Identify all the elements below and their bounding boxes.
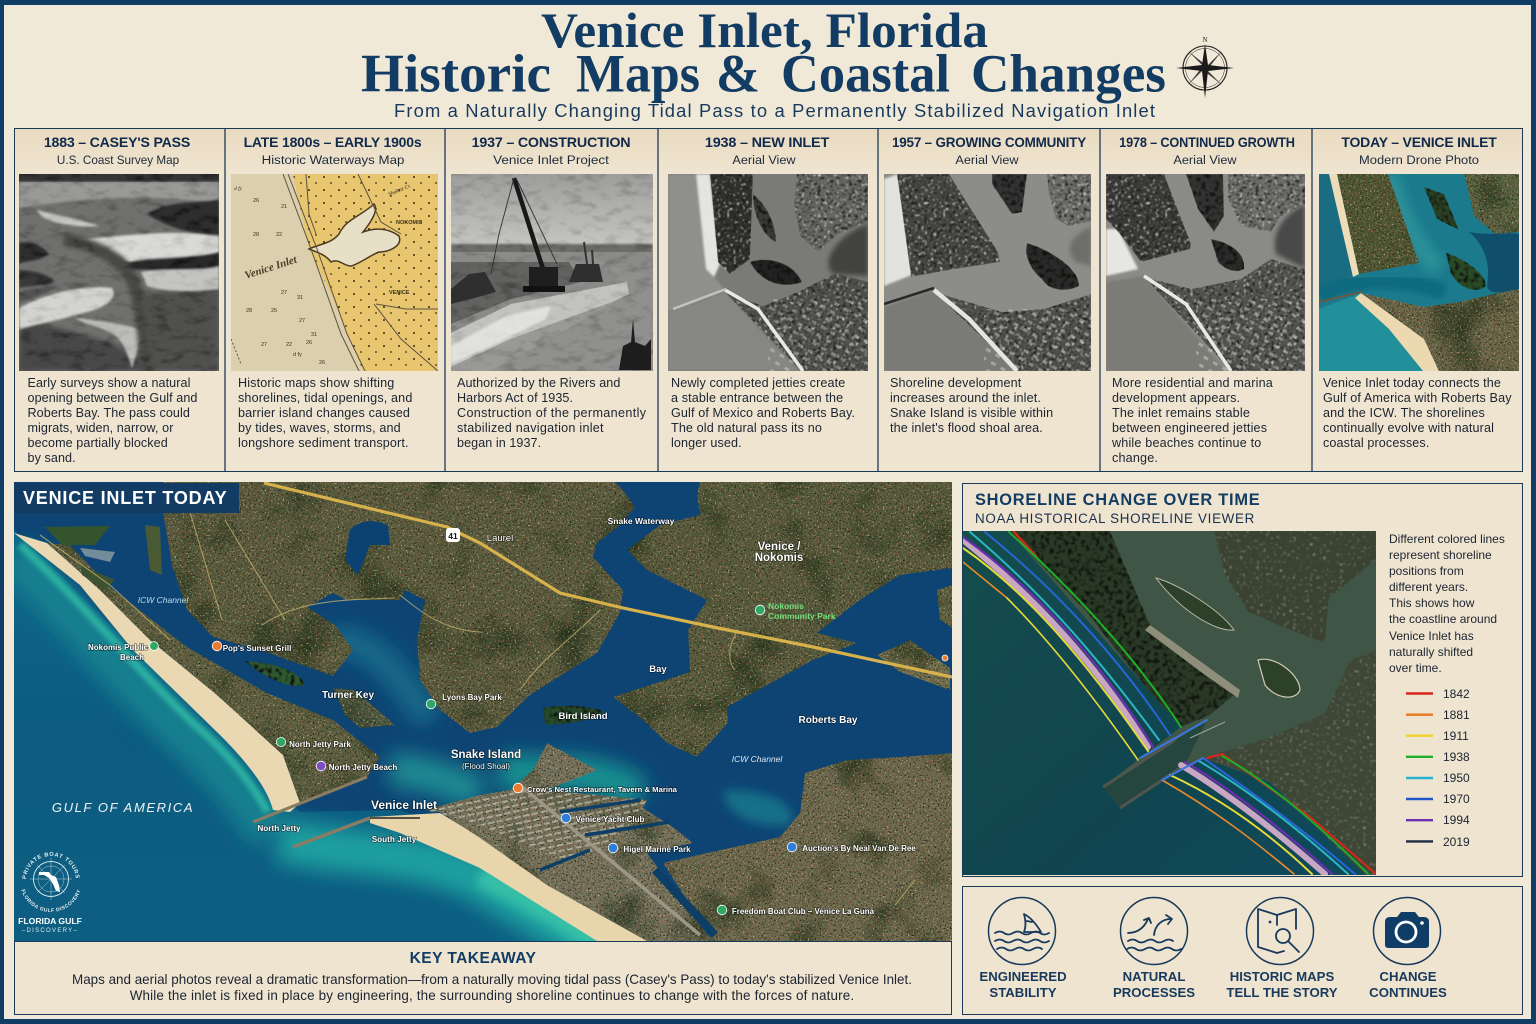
title line 2: & — [716, 44, 760, 104]
heading 1978: 1978 – CONTINUED GROWTH — [1119, 134, 1294, 150]
label: natural processes: PROCESSES — [1113, 984, 1195, 1000]
caption 1978: change. — [1112, 451, 1158, 465]
labels: Beach — [120, 653, 144, 662]
label: natural processes — [1113, 969, 1195, 1000]
timeline column dividers — [224, 129, 1313, 471]
caption 1938: longer used. — [671, 436, 742, 450]
labels: Community Park — [768, 611, 836, 621]
heading 1957: 1957 – GROWING COMMUNITY — [892, 134, 1086, 150]
map: historic waterways chart: 22 — [286, 342, 292, 348]
caption late 1800s: by tides, waves, storms, and — [238, 421, 401, 435]
heading late 1800s: LATE 1800s – EARLY 1900s — [244, 134, 421, 150]
caption late 1800s: shorelines, tidal openings, and — [238, 391, 412, 405]
heading today: TODAY – VENICE INLET — [1341, 134, 1497, 150]
shoreline description: represent shoreline — [1389, 548, 1492, 562]
shoreline description — [1389, 532, 1505, 675]
labels: 41 — [448, 531, 458, 541]
legend: shoreline years: 1970 — [1443, 792, 1470, 806]
shoreline description: Different colored lines — [1389, 532, 1505, 546]
subheading today: Modern Drone Photo — [1359, 153, 1478, 167]
map: historic waterways chart: Shakett Cr. — [388, 183, 412, 198]
photo: 1978 aerial — [1106, 174, 1305, 371]
labels — [52, 516, 916, 916]
labels: North Jetty — [257, 824, 301, 833]
labels: Venice Inlet — [371, 798, 437, 812]
subheading 1937: Venice Inlet Project — [493, 153, 608, 167]
shoreline description: over time. — [1389, 661, 1442, 675]
key takeaway heading: KEY TAKEAWAY — [410, 950, 536, 967]
caption late 1800s: longshore sediment transport. — [238, 436, 409, 450]
shoreline description: positions from — [1389, 564, 1464, 578]
jetties — [253, 777, 367, 822]
label: natural processes: NATURAL — [1123, 969, 1185, 984]
title line 2: Maps — [576, 44, 700, 104]
labels: Lyons Bay Park — [442, 693, 502, 702]
caption 1978: More residential and marina — [1112, 376, 1273, 390]
labels: Bay — [649, 664, 667, 675]
labels: Snake Waterway — [608, 516, 675, 526]
shoreline description: Venice Inlet has — [1389, 629, 1474, 643]
caption today: Gulf of America with Roberts Bay — [1323, 391, 1512, 405]
labels: South Jetty — [372, 835, 417, 844]
islands — [245, 661, 305, 686]
label: engineered stability: STABILITY — [989, 984, 1057, 1000]
caption 1937: began in 1937. — [457, 436, 541, 450]
labels: ICW Channel — [732, 754, 783, 764]
map: Venice Inlet today aerial — [14, 482, 952, 941]
caption 1938: The old natural pass its no — [671, 421, 822, 435]
caption 1937: Harbors Act of 1935. — [457, 391, 573, 405]
caption 1938: Newly completed jetties create — [671, 376, 845, 390]
caption 1957 — [890, 376, 1053, 435]
label: historic maps: HISTORIC MAPS — [1230, 969, 1334, 984]
labels: Venice / — [758, 541, 801, 553]
title line 2: Coastal — [781, 44, 950, 104]
column: today — [1319, 134, 1519, 450]
map: historic waterways chart: 26 — [319, 360, 325, 366]
caption 1937: Authorized by the Rivers and — [457, 376, 620, 390]
labels: Laurel — [487, 533, 513, 544]
legend: shoreline years: 1938 — [1443, 750, 1470, 764]
key takeaway text: Maps and aerial photos reveal a dramatic transformation—from a naturally moving tidal pass (Casey's Pass) to today's stabilized Venice Inlet. — [72, 972, 912, 987]
column: 1957 — [884, 134, 1091, 435]
photo: 1957 aerial — [884, 174, 1091, 371]
column: 1978 — [1106, 134, 1305, 465]
logo: Florida Gulf Discovery: –DISCOVERY– — [22, 928, 78, 934]
map pins — [150, 605, 948, 915]
caption 1938: a stable entrance between the — [671, 391, 843, 405]
labels: North Jetty Park — [289, 740, 351, 749]
labels: North Jetty Beach — [329, 763, 397, 772]
labels: (Flood Shoal) — [462, 762, 510, 771]
title line 2 — [361, 44, 1166, 104]
subtitle: From a Naturally Changing Tidal Pass to a Permanently Stabilized Navigation Inlet — [394, 100, 1155, 121]
caption 1883: migrats, widen, narrow, or — [28, 421, 174, 435]
caption 1938 — [671, 376, 855, 450]
map: historic waterways chart: d fy — [234, 185, 243, 192]
labels: Nokomis — [768, 601, 804, 611]
column: 1883 — [19, 134, 219, 465]
labels: Freedom Boat Club – Venice La Guna — [732, 907, 875, 916]
map title tag: VENICE INLET TODAY — [23, 488, 227, 508]
legend: shoreline years: 1994 — [1443, 813, 1470, 827]
legend: shoreline years: 1950 — [1443, 771, 1470, 785]
caption 1957: Snake Island is visible within — [890, 406, 1053, 420]
shoreline subheading: NOAA HISTORICAL SHORELINE VIEWER — [975, 511, 1255, 526]
caption 1937 — [457, 376, 646, 450]
logo: Florida Gulf Discovery: FLORIDA GULF — [18, 916, 82, 926]
caption 1937: Construction of the permanently — [457, 406, 646, 420]
key takeaway text: While the inlet is fixed in place by engineering, the surrounding shoreline continues to change with the forces of nature. — [130, 988, 854, 1003]
label: historic maps: TELL THE STORY — [1226, 984, 1338, 1000]
map: historic waterways chart: d fy — [293, 352, 302, 358]
photo: 1883 sand shoals — [19, 174, 219, 371]
caption 1957: the inlet's flood shoal area. — [890, 421, 1043, 435]
icon: engineered stability — [988, 896, 1056, 966]
title line 2: Changes — [971, 44, 1166, 104]
subheading late 1800s: Historic Waterways Map — [262, 153, 404, 167]
labels: Crow's Nest Restaurant, Tavern & Marina — [527, 785, 678, 794]
icon: natural processes — [1120, 896, 1188, 966]
caption today: and the ICW. The shorelines — [1323, 406, 1485, 420]
panel: key themes — [962, 886, 1523, 1015]
logo: Florida Gulf Discovery: FLORIDA GULF DISCOVERY — [21, 889, 80, 912]
land masses — [47, 543, 380, 803]
shoreline description: naturally shifted — [1389, 645, 1473, 659]
map: historic waterways chart: NOKOMIS — [396, 220, 423, 226]
labels: Bird Island — [558, 711, 608, 722]
caption today: continually evolve with natural — [1323, 421, 1494, 435]
roads — [40, 512, 915, 905]
caption 1978: The inlet remains stable — [1112, 406, 1250, 420]
heading 1938: 1938 – NEW INLET — [704, 134, 829, 150]
panel: historic timeline — [14, 128, 1523, 472]
panel: key takeaway — [14, 941, 952, 1015]
caption today — [1323, 376, 1512, 450]
labels: Pop's Sunset Grill — [223, 644, 291, 653]
map: historic waterways chart: 27 — [299, 318, 305, 324]
map: historic waterways chart: 27 — [261, 342, 267, 348]
label: change continues — [1369, 969, 1447, 1000]
icon: historic maps — [1246, 896, 1314, 966]
label: change continues: CHANGE — [1379, 969, 1437, 984]
column: 1938 — [668, 134, 868, 450]
legend: shoreline years: 1911 — [1443, 729, 1469, 743]
shoreline heading: SHORELINE CHANGE OVER TIME — [975, 491, 1260, 509]
caption late 1800s: barrier island changes caused — [238, 406, 410, 420]
photo: 1938 aerial — [668, 174, 868, 371]
label: historic maps — [1226, 969, 1338, 1000]
caption 1978: development appears. — [1112, 391, 1240, 405]
label: engineered stability: ENGINEERED — [979, 969, 1067, 984]
label: change continues: CONTINUES — [1369, 984, 1447, 1000]
shoreline description: This shows how — [1389, 596, 1474, 610]
inland water — [14, 482, 952, 941]
legend: shoreline years: 1842 — [1443, 687, 1470, 701]
caption 1937: stabilized navigation inlet — [457, 421, 604, 435]
subheading 1978: Aerial View — [1173, 153, 1237, 167]
map: historic waterways chart: 26 — [306, 340, 312, 346]
map: historic waterways chart: 22 — [276, 232, 282, 238]
panel: shoreline change over time — [962, 483, 1523, 877]
subheading 1957: Aerial View — [955, 153, 1018, 167]
caption today: Venice Inlet today connects the — [1323, 376, 1501, 390]
caption 1883: Early surveys show a natural — [28, 376, 190, 390]
caption 1957: Shoreline development — [890, 376, 1021, 390]
map: historic waterways chart: 26 — [253, 198, 259, 204]
beaches — [14, 533, 300, 812]
labels: Snake Island — [451, 749, 521, 761]
column: late 1800s — [231, 134, 438, 450]
title line 2: Historic — [361, 44, 551, 104]
map: historic waterways chart: 25 — [271, 308, 277, 314]
icon: compass rose: N — [1202, 36, 1208, 44]
caption 1938: Gulf of Mexico and Roberts Bay. — [671, 406, 855, 420]
map: historic waterways chart — [231, 174, 438, 371]
labels: GULF OF AMERICA — [52, 800, 194, 815]
map: historic waterways chart: VENICE — [389, 290, 410, 296]
subheading 1938: Aerial View — [732, 153, 796, 167]
caption late 1800s — [238, 376, 412, 450]
caption 1978 — [1112, 376, 1273, 465]
photo: today colour aerial — [1319, 174, 1519, 371]
column: 1937 — [451, 134, 653, 450]
labels: ICW Channel — [138, 595, 189, 605]
labels: Nokomis Public — [88, 643, 149, 652]
labels: Higel Marine Park — [623, 845, 691, 854]
highway 41 — [264, 483, 952, 677]
labels: Venice Yacht Club — [576, 815, 644, 824]
map: historic waterways chart: 28 — [253, 232, 259, 238]
labels: Turner Key — [322, 690, 374, 701]
label: engineered stability — [979, 969, 1067, 1000]
subheading 1883: U.S. Coast Survey Map — [56, 153, 179, 167]
shoreline description: different years. — [1389, 580, 1468, 594]
shoreline description: the coastline around — [1389, 612, 1497, 626]
caption 1883: opening between the Gulf and — [28, 391, 198, 405]
map: historic waterways chart: Venice Inlet — [243, 253, 299, 282]
historic shoreline lines — [963, 532, 1376, 874]
caption late 1800s: Historic maps show shifting — [238, 376, 394, 390]
icon: compass rose — [1176, 36, 1234, 98]
logo: Florida Gulf Discovery: PRIVATE BOAT TOURS — [22, 852, 80, 879]
caption 1957: increases around the inlet. — [890, 391, 1041, 405]
labels: Nokomis — [755, 552, 803, 564]
chart: shoreline change satellite map — [963, 531, 1376, 875]
map: historic waterways chart: 21 — [281, 204, 287, 210]
caption 1883: by sand. — [28, 451, 76, 465]
heading 1883: 1883 – CASEY'S PASS — [44, 134, 190, 150]
header title block — [361, 5, 1166, 121]
map: historic waterways chart: 28 — [246, 308, 252, 314]
caption today: coastal processes. — [1323, 436, 1429, 450]
legend: shoreline years: 1881 — [1443, 708, 1470, 722]
photo: 1937 dredging crane — [451, 174, 653, 371]
caption 1883: become partially blocked — [28, 436, 168, 450]
logo: Florida Gulf Discovery — [18, 852, 82, 934]
caption 1883: Roberts Bay. The pass could — [28, 406, 190, 420]
icon: camera — [1372, 896, 1442, 966]
key takeaway text — [72, 972, 912, 1003]
timeline heading band — [15, 129, 1522, 173]
heading 1937: 1937 – CONSTRUCTION — [471, 134, 630, 150]
caption 1978: between engineered jetties — [1112, 421, 1267, 435]
map title tag — [14, 483, 239, 513]
labels: Roberts Bay — [799, 715, 858, 726]
map: historic waterways chart: 27 — [281, 290, 287, 296]
labels: Auction's By Neal Van De Ree — [802, 844, 916, 853]
legend: shoreline years — [1406, 687, 1470, 849]
caption 1883 — [28, 376, 198, 465]
map: historic waterways chart: 31 — [311, 332, 317, 338]
caption 1978: while beaches continue to — [1112, 436, 1261, 450]
legend: shoreline years: 2019 — [1443, 835, 1470, 849]
map: historic waterways chart: 31 — [297, 295, 303, 301]
lakes and marina channels — [345, 521, 390, 575]
